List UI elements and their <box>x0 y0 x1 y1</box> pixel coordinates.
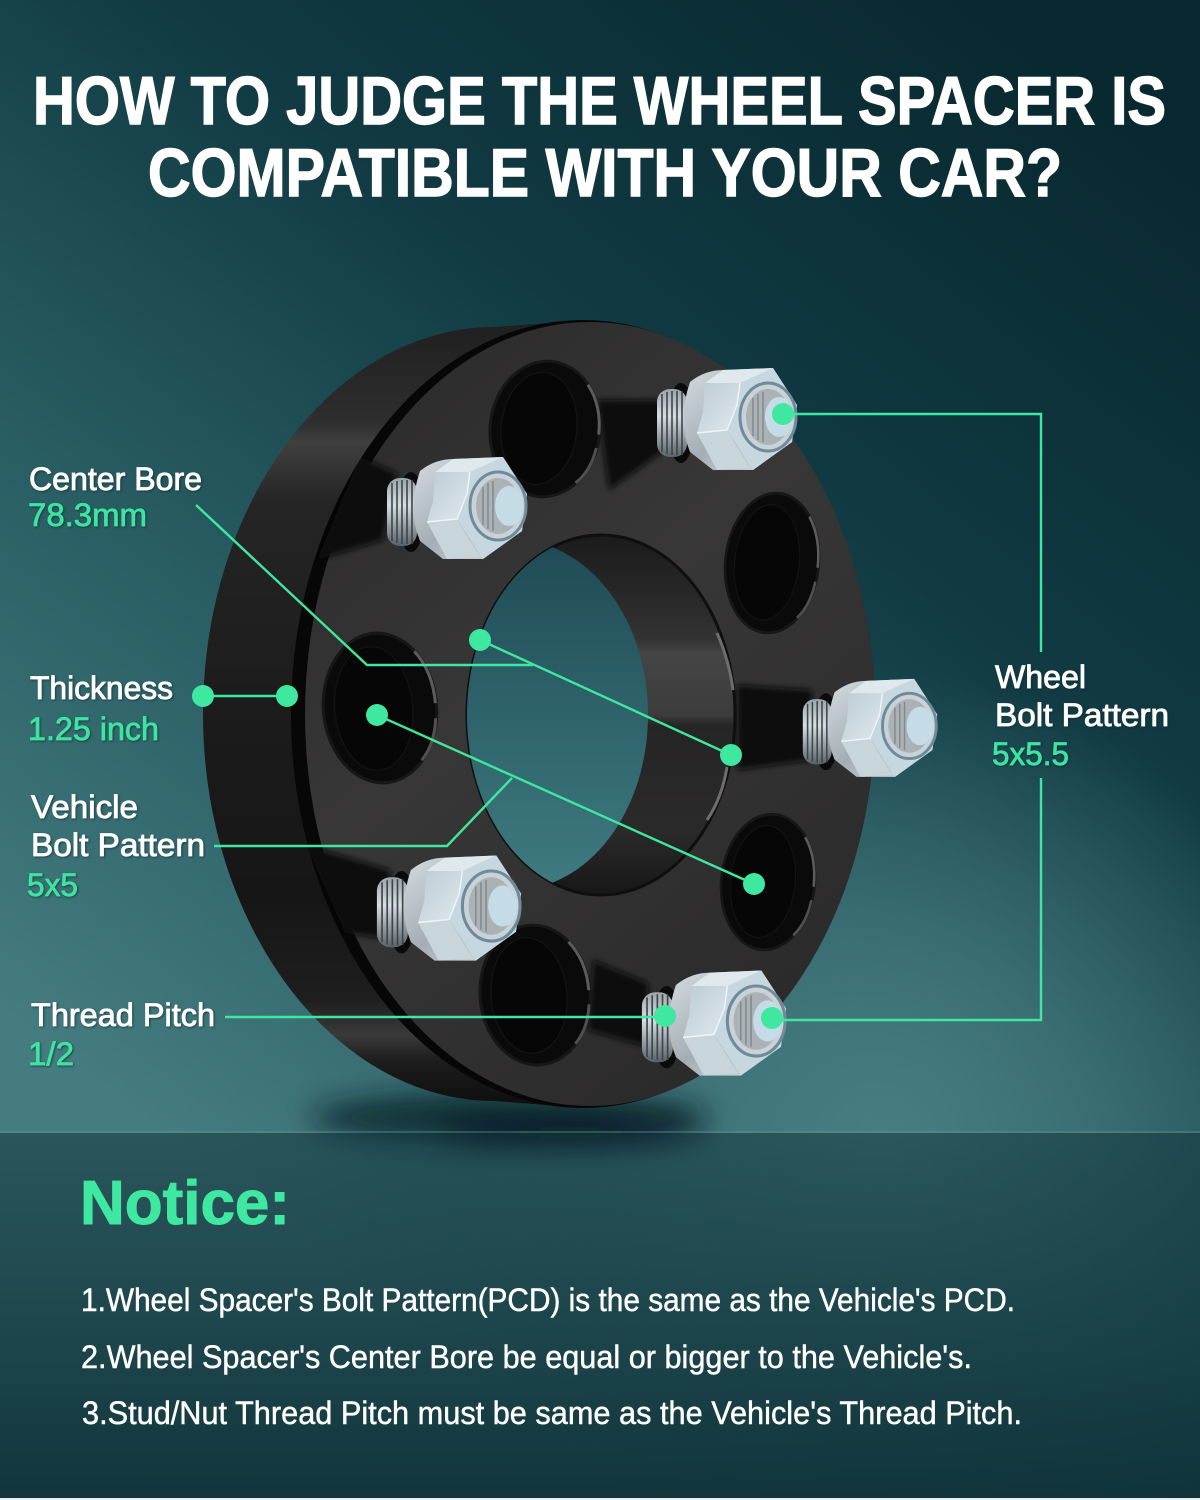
lug holes <box>317 356 826 1070</box>
center bore opening <box>467 548 648 882</box>
callout: thread pitch line <box>225 1016 665 1018</box>
disc side wall <box>203 320 583 1108</box>
label: center bore: 78.3mm <box>28 497 147 533</box>
callout: wheel bolt pattern line <box>772 414 1041 1020</box>
label: vehicle bolt pattern: Bolt Pattern <box>31 827 205 863</box>
notice list: 1.Wheel Spacer's Bolt Pattern(PCD) is the same as the Vehicle's PCD. <box>81 1282 1015 1318</box>
label: thread pitch <box>28 997 215 1072</box>
wheel spacer product illustration <box>203 320 937 1144</box>
notice list: 3.Stud/Nut Thread Pitch must be same as the Vehicle's Thread Pitch. <box>82 1395 1022 1431</box>
label: thickness: 1.25 inch <box>28 711 159 747</box>
title: COMPATIBLE WITH YOUR CAR? <box>148 135 1062 211</box>
disc ground shadow <box>310 1092 710 1144</box>
stud bolts <box>377 368 937 1076</box>
label: vehicle bolt pattern: Vehicle <box>31 789 138 825</box>
callout: center bore line <box>196 505 731 755</box>
label: vehicle bolt pattern: 5x5 <box>27 867 78 903</box>
notice list <box>81 1282 1022 1431</box>
label: thread pitch: Thread Pitch <box>31 997 215 1033</box>
label: center bore: Center Bore <box>29 461 202 497</box>
callout: vehicle bolt pattern line <box>214 715 754 884</box>
notice list: 2.Wheel Spacer's Center Bore be equal or bigger to the Vehicle's. <box>81 1339 972 1375</box>
label: thread pitch: 1/2 <box>28 1036 74 1072</box>
center bore wall <box>467 535 735 895</box>
notice heading: Notice: <box>80 1169 290 1238</box>
callout dots <box>192 403 794 1029</box>
disc front face <box>305 322 875 1106</box>
disc rim crescent <box>291 320 875 1108</box>
title <box>33 63 1166 211</box>
label: wheel bolt pattern: Wheel <box>995 659 1086 695</box>
label: thickness <box>28 670 173 747</box>
label: wheel bolt pattern: Bolt Pattern <box>995 697 1169 733</box>
label: vehicle bolt pattern <box>27 789 205 903</box>
label: wheel bolt pattern: 5x5.5 <box>992 736 1069 772</box>
label: wheel bolt pattern <box>992 659 1169 772</box>
bolt cast shadows <box>306 400 812 1047</box>
callout lines and dots <box>192 403 1041 1029</box>
callout: thickness line <box>203 695 287 697</box>
label: center bore <box>28 461 202 533</box>
notice panel background <box>0 1133 1200 1498</box>
label: thickness: Thickness <box>30 670 173 706</box>
